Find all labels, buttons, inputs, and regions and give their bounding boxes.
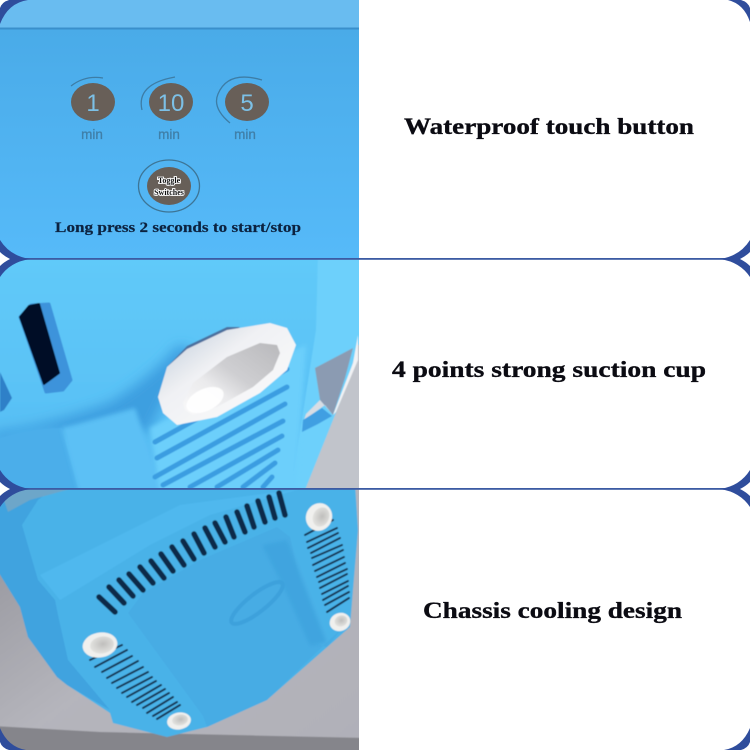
- slot opening: [20, 304, 71, 392]
- shading: body ridge: [0, 345, 195, 445]
- vent slots: [155, 369, 287, 487]
- heading: waterproof touch button: Waterproof touch button: [404, 114, 694, 139]
- panel: suction cup photo: [0, 253, 365, 495]
- bracket: [302, 335, 358, 432]
- chassis body: [0, 483, 358, 737]
- button: 5 min: min: [234, 127, 256, 142]
- button: 10 min: [141, 77, 193, 142]
- button: 1 min: 1: [86, 90, 100, 117]
- button: 10 min: min: [158, 127, 180, 142]
- panel: chassis photo: [0, 483, 365, 750]
- button: 1 min: min: [81, 127, 103, 142]
- side opening: [0, 372, 12, 412]
- right vent: [305, 520, 349, 612]
- button: 10 min: 10: [158, 90, 184, 117]
- suction foot: top right: [305, 502, 333, 532]
- heading: chassis cooling: Chassis cooling design: [423, 598, 682, 623]
- embossed logo: [230, 580, 284, 626]
- top vent row: [99, 493, 285, 612]
- button: toggle switches: Switches: [154, 188, 184, 197]
- background: grey wall: [305, 344, 359, 488]
- heading: suction cup: 4 points strong suction cup: [392, 357, 706, 382]
- button: 5 min: 5: [240, 90, 254, 117]
- button: 1 min: [71, 77, 115, 142]
- suction cup: [158, 323, 296, 425]
- left vent: [90, 645, 180, 719]
- button: toggle switches: Toggle: [158, 176, 181, 185]
- suction foot: bottom right: [328, 612, 351, 632]
- button: toggle switches: [138, 160, 200, 212]
- suction foot: bottom: [166, 712, 192, 730]
- instruction text: Long press 2 seconds to start/stop: [55, 220, 301, 236]
- button: 5 min: [216, 77, 269, 142]
- recessed plate: [128, 527, 345, 727]
- panel: waterproof touch button: [0, 0, 359, 259]
- floor band: [0, 726, 365, 750]
- suction foot: left: [82, 632, 118, 658]
